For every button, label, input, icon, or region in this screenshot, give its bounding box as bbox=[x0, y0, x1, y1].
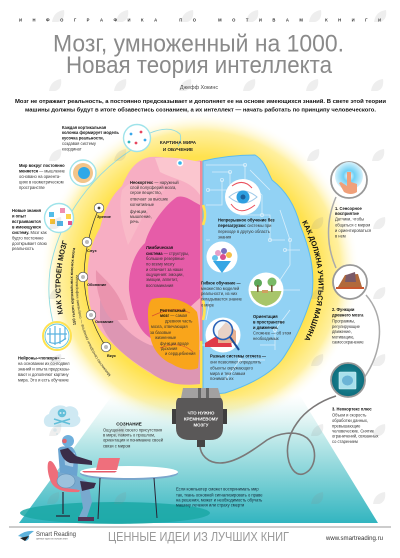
text: node 1: в нем bbox=[335, 234, 346, 238]
sense: hearing: Слух bbox=[87, 248, 97, 253]
text: limbic system: система — структуры, bbox=[146, 251, 189, 256]
text: node 2: регулирующие bbox=[332, 324, 361, 329]
sense: smell: Обоняние bbox=[87, 282, 107, 287]
icon: skull cloud bbox=[44, 405, 80, 435]
chair bbox=[48, 461, 80, 492]
text: cortical column: Каждая кортикальная bbox=[62, 125, 107, 130]
node 1: sensory bbox=[331, 162, 367, 198]
sense: hearing bbox=[82, 237, 97, 253]
text: machine fear: Если компьютер сможет воспринимать мир bbox=[176, 486, 259, 492]
text: neocortex: Неокортекс — наружный bbox=[130, 180, 179, 185]
text: cortical column: координат bbox=[62, 146, 82, 152]
heading: world picture: КАРТИНА МИРА bbox=[160, 140, 197, 145]
text: world changes: пространстве bbox=[19, 185, 46, 190]
icon: eye circle bbox=[225, 179, 261, 215]
blue lobe bbox=[203, 155, 313, 395]
plug neck bbox=[197, 440, 205, 447]
text: continuous learning: знания bbox=[218, 234, 231, 240]
text: reptilian brain: мозга, отвечающая bbox=[151, 324, 188, 329]
text: node 1: 1. Сенсорное bbox=[335, 206, 363, 211]
footer logo bbox=[18, 531, 76, 541]
text: neurons: Нейроны-«попкорн» — bbox=[18, 356, 65, 360]
text: world changes: основано на ориента- bbox=[19, 174, 61, 179]
text: reference frames: объекты окружающего bbox=[210, 366, 254, 370]
curved caption: cortical columns: 150 тысяч кортикальных колонок мозга bbox=[70, 248, 76, 325]
text: node 3: превышающие bbox=[332, 424, 361, 428]
text: new knowledge: встраиваются bbox=[12, 219, 41, 224]
sense: touch: Осязание bbox=[95, 319, 114, 324]
text: node 2: самосохранение bbox=[332, 340, 364, 344]
intro text bbox=[15, 98, 386, 114]
title: Мозг, умноженный на 1000. bbox=[53, 30, 344, 58]
text: node 3: человеческие. Снятие bbox=[332, 428, 375, 434]
text: node 3: 3. Неокортекс плюс bbox=[332, 406, 372, 412]
text: limbic system: по всему мозгу bbox=[146, 262, 176, 266]
illustration: robot at desk bbox=[48, 435, 178, 521]
text: world changes: циях в изометрическом bbox=[19, 180, 64, 184]
text: world changes: Мир вокруг постоянно bbox=[19, 163, 65, 168]
pale upper folds bbox=[155, 157, 200, 195]
footer logo: ценные идеи из лучших книг bbox=[36, 538, 68, 541]
text: reptilian brain: жизненные bbox=[155, 335, 177, 340]
text: flexible learning: о мире bbox=[201, 302, 215, 308]
plug top connector bbox=[181, 388, 221, 398]
text: orientation: и движении. bbox=[253, 325, 278, 330]
text: reptilian brain: функции вроде bbox=[160, 341, 190, 346]
sense: taste bbox=[101, 342, 117, 358]
text: consciousness: в мире, память о прошлом, bbox=[103, 432, 155, 438]
plug caption: КРЕМНИЕВОМУ bbox=[184, 416, 218, 422]
text: new knowledge: реальность bbox=[12, 246, 34, 251]
robot torso bbox=[58, 446, 78, 478]
node 2: old brain bbox=[333, 265, 367, 299]
header strip: И Н Ф О Г Р А Ф И К А П О М О Т И В А М К Н И Г И bbox=[19, 18, 381, 22]
icon: neurons bbox=[43, 322, 71, 350]
text: neurons: мира. Это и есть обучение bbox=[18, 378, 70, 382]
text: neocortex: мышление, bbox=[130, 214, 152, 219]
text: node 3: ограничений, связанных bbox=[332, 434, 378, 438]
sense: touch bbox=[86, 310, 114, 324]
text: limbic system: Лимбическая bbox=[146, 245, 174, 250]
author: Джефф Хокинс bbox=[180, 85, 218, 91]
icon: isometric world bbox=[70, 160, 96, 186]
circuit lines bbox=[202, 163, 300, 380]
plug caption: ЧТО НУЖНО bbox=[188, 410, 215, 416]
text: orientation: Сложнее — об этом bbox=[253, 330, 291, 336]
text: machine fear: так, ткань основной сигнализировать о праве bbox=[176, 492, 263, 498]
central yellow glints bbox=[203, 205, 205, 320]
midline strip bbox=[200, 161, 202, 341]
text: cortical column: колонка формирует модель bbox=[62, 130, 119, 135]
text: limbic system: большие резервные bbox=[146, 256, 185, 261]
sense: smell bbox=[78, 272, 107, 287]
text: reptilian brain: и сердцебиения bbox=[165, 351, 196, 356]
text: new knowledge: в имеющуюся bbox=[12, 224, 41, 230]
lower mauve lobe bbox=[100, 300, 200, 385]
text: neocortex: слой полусферий мозга, bbox=[130, 185, 176, 190]
text: node 2: движение, bbox=[332, 329, 352, 334]
text: node 3: со старением bbox=[332, 439, 358, 444]
text: limbic system: и отвечает за наши bbox=[146, 267, 183, 272]
teal floor triangle bbox=[19, 371, 378, 523]
text: flexible learning: Гибкое обучение — bbox=[201, 280, 241, 286]
table bbox=[80, 467, 178, 480]
text: node 2: 2. Функции bbox=[332, 307, 355, 312]
text: limbic system: воспоминания bbox=[146, 283, 173, 288]
brain outer lobes bbox=[88, 157, 201, 385]
text: orientation: необходимых bbox=[253, 336, 279, 341]
orange fold strokes bbox=[152, 310, 193, 352]
text: reptilian brain: мозг — самая bbox=[160, 313, 187, 318]
intro text: Мозг не отражает реальность, а постоянно предсказывает и дополняет ее на основе имеющихся знаний. В свете этой теории bbox=[15, 98, 386, 105]
curved heading: how brain works: КАК УСТРОЕН МОЗГ bbox=[55, 240, 67, 314]
panel: brain right hemisphere bbox=[202, 155, 313, 395]
cyan arc linking left circles bbox=[49, 129, 181, 336]
yellow glow background bbox=[40, 112, 360, 432]
text: reference frames: Разные системы отсчета — bbox=[210, 354, 267, 358]
watermark bbox=[47, 10, 386, 504]
laptop bbox=[96, 458, 120, 470]
intro text: машины должны будут в итоге обзавестись сознанием, а их интеллект — начать работать по принципу человеческого. bbox=[25, 106, 377, 114]
floor ellipse bbox=[20, 502, 210, 524]
text: neocortex: отвечает за высшие bbox=[130, 196, 169, 202]
heading: world picture: И ОБУЧЕНИЕ bbox=[163, 147, 193, 152]
title bbox=[53, 30, 344, 79]
sense: vision: Зрение bbox=[97, 214, 112, 219]
sense: vision bbox=[94, 203, 112, 219]
text: flexible learning: реальности, из них bbox=[201, 291, 237, 296]
robot legs bbox=[58, 472, 92, 517]
text: node 2: древнего мозга bbox=[332, 312, 364, 318]
text: orientation: в пространстве bbox=[253, 320, 285, 324]
text: node 1: общаться с миром bbox=[335, 222, 370, 228]
text: reptilian brain: древняя часть bbox=[165, 318, 192, 324]
text: limbic system: ощущения: эмоции, bbox=[146, 272, 184, 277]
text: neocortex: функции, bbox=[130, 209, 147, 214]
text: neurons: на основании их со-подвел bbox=[18, 361, 70, 366]
text: node 1: Датчики, чтобы bbox=[335, 216, 364, 222]
text: node 1: восприятие bbox=[335, 211, 360, 216]
text: consciousness: связи с миром bbox=[103, 444, 131, 448]
text: node 1: и ориентироваться bbox=[335, 228, 371, 233]
icon: ice cream circle bbox=[206, 242, 238, 273]
reptilian brain bbox=[148, 298, 199, 370]
title: Новая теория интеллекта bbox=[66, 52, 333, 79]
text: reptilian brain: за базовые bbox=[150, 330, 172, 335]
text: orientation: Ориентация bbox=[253, 314, 278, 319]
text: reference frames: понимать их bbox=[210, 376, 234, 381]
footer url: www.smartreading.ru bbox=[325, 535, 384, 542]
curved caption: cortical columns bbox=[70, 248, 76, 325]
text: continuous learning: перезагрузки: системы при bbox=[218, 223, 271, 228]
silicon brain plug bbox=[172, 388, 227, 447]
text: continuous learning: переходе в другую область bbox=[218, 229, 270, 234]
text: reference frames: они позволяют определять bbox=[210, 360, 261, 364]
icon: cortical column bbox=[124, 124, 150, 152]
plug caption: МОЗГУ bbox=[193, 422, 209, 428]
text: neocortex: речь bbox=[130, 219, 139, 224]
text: consciousness bbox=[103, 422, 163, 448]
sense: taste: Вкус bbox=[107, 353, 117, 358]
text: machine fear: на решения, может и необходимость обучать bbox=[176, 498, 262, 502]
text: reptilian brain: дыхания bbox=[161, 346, 177, 351]
text: neurons: знаний и опыта предсказы- bbox=[18, 366, 71, 372]
footer slogan: ЦЕННЫЕ ИДЕИ ИЗ ЛУЧШИХ КНИГ bbox=[108, 530, 289, 544]
text: cortical column: создавая систему bbox=[62, 141, 97, 146]
text: new knowledge: и опыт bbox=[12, 214, 26, 218]
text: consciousness: СОЗНАНИЕ bbox=[116, 422, 142, 426]
cable path bbox=[200, 396, 336, 474]
text: new knowledge: будто постоянно bbox=[12, 236, 44, 240]
curved heading: how machine should learn: КАК ДОЛЖНА УЧИТЬСЯ МАШИНА bbox=[302, 220, 324, 340]
logo mark bbox=[18, 531, 34, 541]
plug side tabs bbox=[172, 409, 227, 424]
curved caption: sensory signals: Множество сенсорных сигналов — получение информации bbox=[75, 275, 111, 376]
connector slots bbox=[198, 388, 209, 398]
text: continuous learning: Непрерывное обучение без bbox=[218, 218, 275, 222]
panel: brain left hemisphere bbox=[88, 157, 202, 385]
footer rule bbox=[9, 526, 391, 528]
text: machine fear: машину лечения или страху смерти bbox=[176, 502, 244, 508]
limbic system bbox=[129, 197, 200, 340]
text: flexible learning: множество моделей bbox=[201, 286, 239, 291]
text: neurons: вают и дополняют картину bbox=[18, 372, 70, 377]
icon: park circle bbox=[248, 272, 284, 308]
text: node 2: Программы, bbox=[332, 318, 355, 324]
text: consciousness: Ощущение своего присутствия bbox=[103, 428, 162, 432]
text: consciousness: ориентация и понимание своей bbox=[103, 438, 163, 442]
text: node 3: обработки данных, bbox=[332, 418, 368, 423]
connecting line bbox=[84, 208, 106, 347]
footer logo: Smart Reading bbox=[36, 532, 76, 538]
text: flexible learning: складывается знание bbox=[201, 296, 243, 302]
text: neocortex: когнитивные bbox=[130, 202, 155, 207]
text: neocortex: серое вещество, bbox=[130, 190, 162, 195]
text: cortical column: кусочка реальности, bbox=[62, 136, 104, 140]
text: reptilian brain: Рептильный bbox=[160, 308, 186, 313]
text: new knowledge: Новые знания bbox=[12, 208, 42, 213]
text: limbic system: эмоции, аппетит, bbox=[146, 277, 178, 282]
connector line between machine nodes bbox=[328, 197, 379, 378]
text: new knowledge: дооткрывает свою bbox=[12, 241, 47, 246]
text: new knowledge: систему. Мозг как bbox=[12, 230, 47, 235]
neocortex marker bbox=[177, 160, 183, 166]
node 3: neocortex bbox=[331, 363, 365, 397]
robot head bbox=[62, 435, 74, 447]
text: world changes: меняется — мышление bbox=[19, 168, 65, 174]
icon: puzzle bbox=[44, 204, 74, 232]
text: node 2: мотивацию, bbox=[332, 334, 354, 340]
robot arm bbox=[60, 448, 92, 465]
plug body bbox=[176, 398, 223, 440]
text: reference frames: мира и тем самым bbox=[210, 371, 245, 376]
icon: magnifier circle bbox=[205, 318, 240, 352]
sensory chain bbox=[78, 203, 117, 358]
text: node 3: Объем и скорость bbox=[332, 412, 366, 418]
